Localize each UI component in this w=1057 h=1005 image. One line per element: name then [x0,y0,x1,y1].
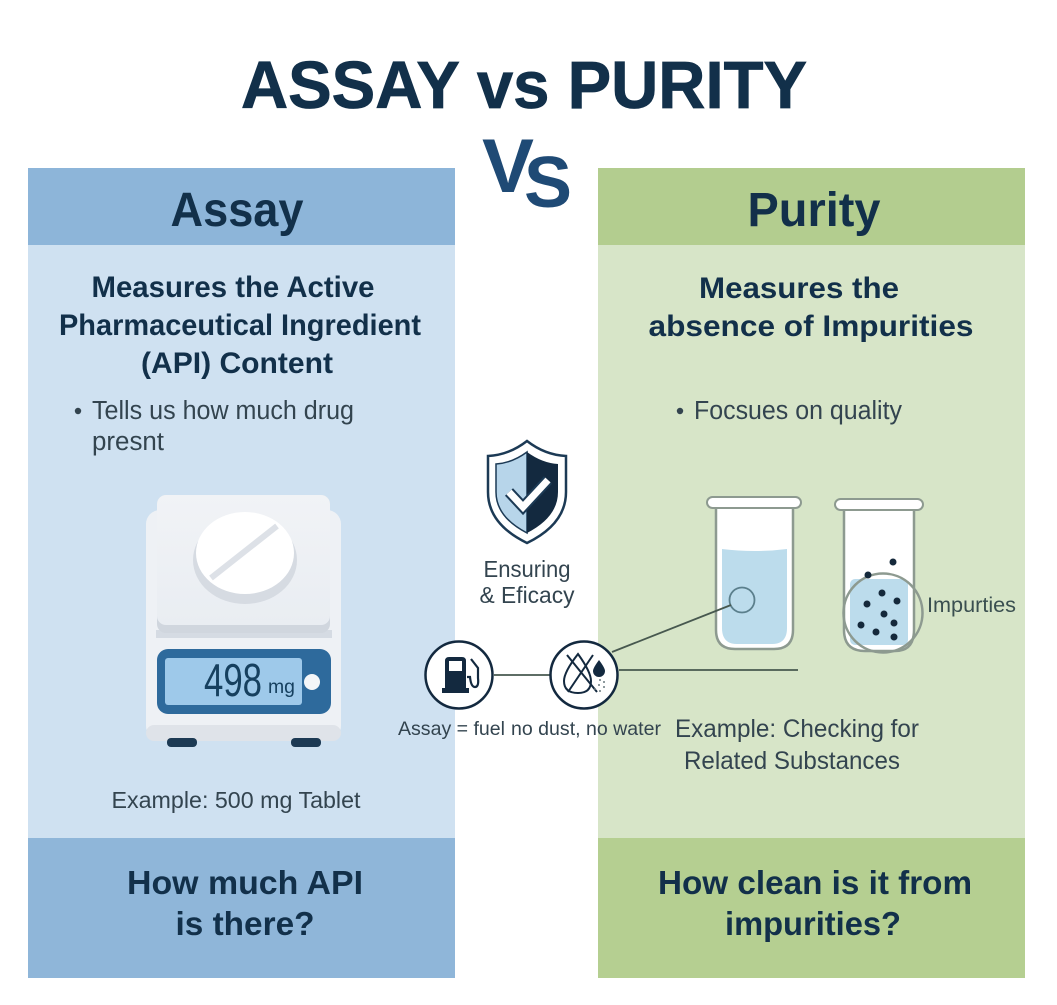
assay footer: How much API [127,864,363,901]
purity definition: Measures the [699,272,899,305]
assay definition [59,271,421,380]
ensuring efficacy label: Ensuring [484,556,570,582]
purity example: Related Substances [684,747,900,775]
assay header: Assay [170,184,304,237]
purity example: Example: Checking for [675,715,919,743]
connector lines [494,605,798,675]
assay footer: is there? [176,905,314,942]
ensuring efficacy label [480,556,575,608]
panel: assay [28,168,455,978]
purity header: Purity [748,184,881,237]
icon: no dust no water [550,642,618,708]
assay definition: Pharmaceutical Ingredient [59,309,421,342]
assay header [28,168,455,245]
purity bullet: Focsues on quality [694,397,902,425]
icon: weighing scale with tablet: 498 [204,654,262,706]
purity footer [598,838,1025,978]
icon: weighing scale with tablet [146,495,341,747]
vs mark: V [482,124,534,209]
title: ASSAY vs PURITY [241,48,807,123]
assay bullet [75,397,354,456]
icon: shield [488,441,566,543]
purity footer: impurities? [725,905,901,942]
analogy captions: Assay = fuel [398,718,505,740]
assay footer [28,838,455,978]
purity definition [648,272,974,343]
icon: test tube with impurities [835,499,923,652]
icon: fuel pump [426,642,492,708]
purity footer: How clean is it from [658,864,972,901]
assay definition: Measures the Active [92,271,374,304]
vs mark: S [524,143,572,223]
analogy captions: no dust, no water [511,718,662,740]
panel: purity [598,168,1025,978]
purity example [675,715,919,775]
purity definition: absence of Impurities [648,310,974,343]
purity header [598,168,1025,245]
assay definition: (API) Content [141,347,333,380]
analogy captions [398,718,662,740]
vs mark [482,124,572,223]
assay bullet: presnt [92,428,164,456]
impurities label: Impurties [927,594,1016,617]
ensuring efficacy label: & Eficacy [480,582,575,608]
assay bullet: Tells us how much drug [92,397,354,425]
icon: weighing scale with tablet: mg [268,677,295,698]
icon: clean test tube [707,497,801,649]
assay example: Example: 500 mg Tablet [112,787,361,813]
